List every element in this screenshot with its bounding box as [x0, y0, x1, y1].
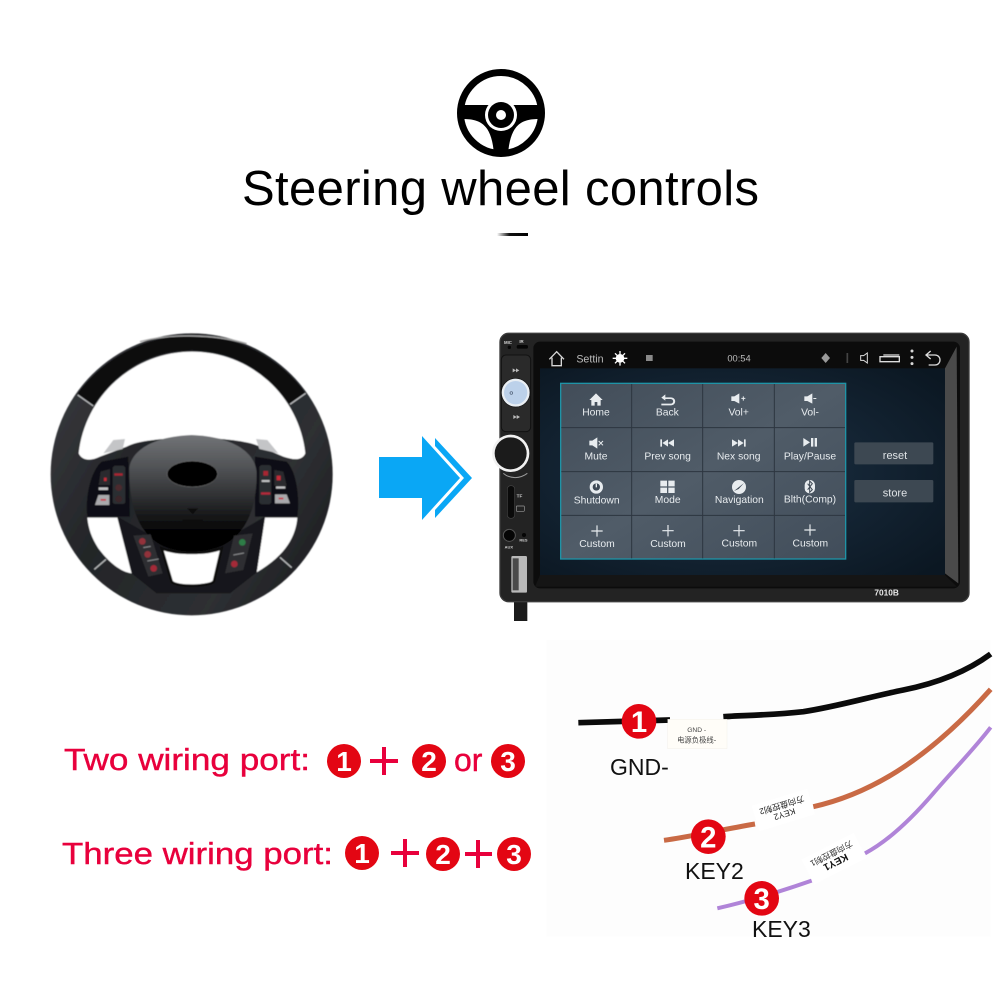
- label KEY2: KEY2: [685, 858, 744, 884]
- badge 2: [412, 744, 446, 778]
- lower spokes: [117, 517, 265, 593]
- model label: 7010B: [874, 587, 899, 597]
- badge 2: 2: [421, 746, 437, 777]
- reset button: reset: [883, 450, 907, 462]
- badge 3: 3: [506, 839, 522, 870]
- store button: store: [883, 488, 907, 500]
- photo: head unit: [492, 333, 969, 621]
- badge 2: 2: [700, 821, 716, 854]
- three wiring port text: Three wiring port:: [62, 836, 333, 871]
- plus: [391, 839, 419, 867]
- badge 1: 1: [354, 838, 370, 869]
- centre lower opening: [162, 548, 222, 586]
- label KEY3: KEY3: [752, 916, 811, 942]
- status bar: Settin: [576, 353, 604, 365]
- upper opening: [79, 352, 305, 460]
- stalk: [514, 600, 527, 621]
- wire tag KEY2: [752, 789, 815, 831]
- bezel: [533, 342, 960, 588]
- control panel grid: Custom: [793, 538, 828, 549]
- wire tag KEY1: KEY1: [821, 851, 850, 873]
- wire tag KEY2: 方向盘控制2: [758, 794, 805, 817]
- wood trim top arc: [78, 335, 306, 406]
- control panel grid: Back: [656, 408, 680, 419]
- control panel grid: Vol+: [728, 407, 749, 418]
- left control strip: MIC: [504, 340, 512, 345]
- row 3: [590, 480, 603, 494]
- store button: [854, 480, 933, 502]
- control panel grid: Custom: [579, 539, 615, 550]
- row 4: [591, 524, 816, 537]
- left control strip: IR: [519, 339, 525, 344]
- badge 3: [491, 744, 525, 778]
- badge 1: [345, 836, 379, 870]
- badge 2: 2: [435, 839, 451, 870]
- row 2: [589, 437, 597, 449]
- badge 1: 1: [631, 706, 647, 739]
- wire tag KEY1: 方向盘控制1: [808, 839, 854, 869]
- lower left buttons: [133, 534, 163, 577]
- left control strip: TF: [517, 494, 523, 499]
- lower right opening: [257, 518, 297, 572]
- left control strip: AUX: [505, 544, 513, 549]
- photo: wires: [547, 640, 991, 937]
- left buttons: [95, 466, 125, 505]
- badge 2: [426, 837, 460, 871]
- title underline dash: [497, 233, 528, 236]
- control panel grid: Play/Pause: [784, 451, 836, 462]
- left control strip: [492, 339, 531, 593]
- photo: steering wheel: [51, 333, 333, 615]
- wire tag KEY1: [802, 833, 866, 884]
- badge 3: 3: [754, 883, 770, 916]
- wire tag KEY2: KEY2: [772, 806, 797, 822]
- control panel grid: Nex song: [717, 452, 761, 463]
- badge 1: 1: [336, 746, 352, 777]
- icon: steering wheel: [460, 72, 542, 155]
- left control strip: RES: [519, 538, 528, 543]
- hub cover: [129, 435, 257, 552]
- label GND-: GND-: [610, 754, 669, 780]
- plus: [465, 840, 492, 868]
- control panel grid: Custom: [722, 539, 757, 550]
- control panel grid: Navigation: [715, 495, 764, 506]
- orange KEY2 wire: [664, 689, 991, 840]
- arrow: blue double arrow: [379, 436, 472, 520]
- two wiring port row: [64, 742, 525, 778]
- badge 1: [327, 744, 361, 778]
- wire tag GND: GND -: [687, 727, 706, 734]
- control panel grid: Custom: [650, 539, 686, 550]
- wheel rim: [51, 333, 333, 615]
- head unit body: [500, 333, 969, 602]
- or: or: [454, 742, 483, 778]
- control panel grid: Blth(Comp): [784, 494, 836, 505]
- control panel grid: [561, 383, 846, 559]
- plus: [370, 747, 398, 775]
- emblem: [167, 461, 218, 487]
- title: Steering wheel controls: [242, 162, 759, 216]
- badge 3: [497, 837, 531, 871]
- paddles: [103, 439, 125, 453]
- three wiring port row: [62, 836, 531, 871]
- side control pods: [87, 457, 130, 517]
- badge 3: 3: [500, 746, 516, 777]
- control panel grid: Shutdown: [574, 495, 620, 506]
- control panel grid: Mode: [655, 495, 681, 506]
- two wiring port text: Two wiring port:: [64, 742, 310, 777]
- right buttons: [259, 465, 290, 504]
- status bar: [549, 349, 940, 366]
- badge 2: [691, 819, 726, 854]
- control panel grid: Mute: [585, 452, 608, 463]
- hub logo mark: [183, 509, 203, 520]
- badge 1: [622, 704, 656, 739]
- badge 3: [744, 881, 779, 916]
- reset button: [854, 442, 933, 464]
- wire tag GND: 电源负极线-: [677, 736, 717, 745]
- screen: [540, 368, 945, 575]
- black GND wire: [578, 654, 991, 723]
- control panel grid: Home: [582, 408, 610, 419]
- lower right buttons: [225, 533, 253, 573]
- wire tag GND: [668, 719, 727, 749]
- status bar: 00:54: [727, 353, 751, 363]
- purple KEY3 wire: [717, 727, 991, 908]
- photo backdrop: [547, 640, 991, 937]
- control panel grid: Vol-: [801, 407, 819, 418]
- row 1: [589, 393, 603, 406]
- lower left opening: [87, 518, 132, 573]
- control panel grid: Prev song: [644, 452, 691, 463]
